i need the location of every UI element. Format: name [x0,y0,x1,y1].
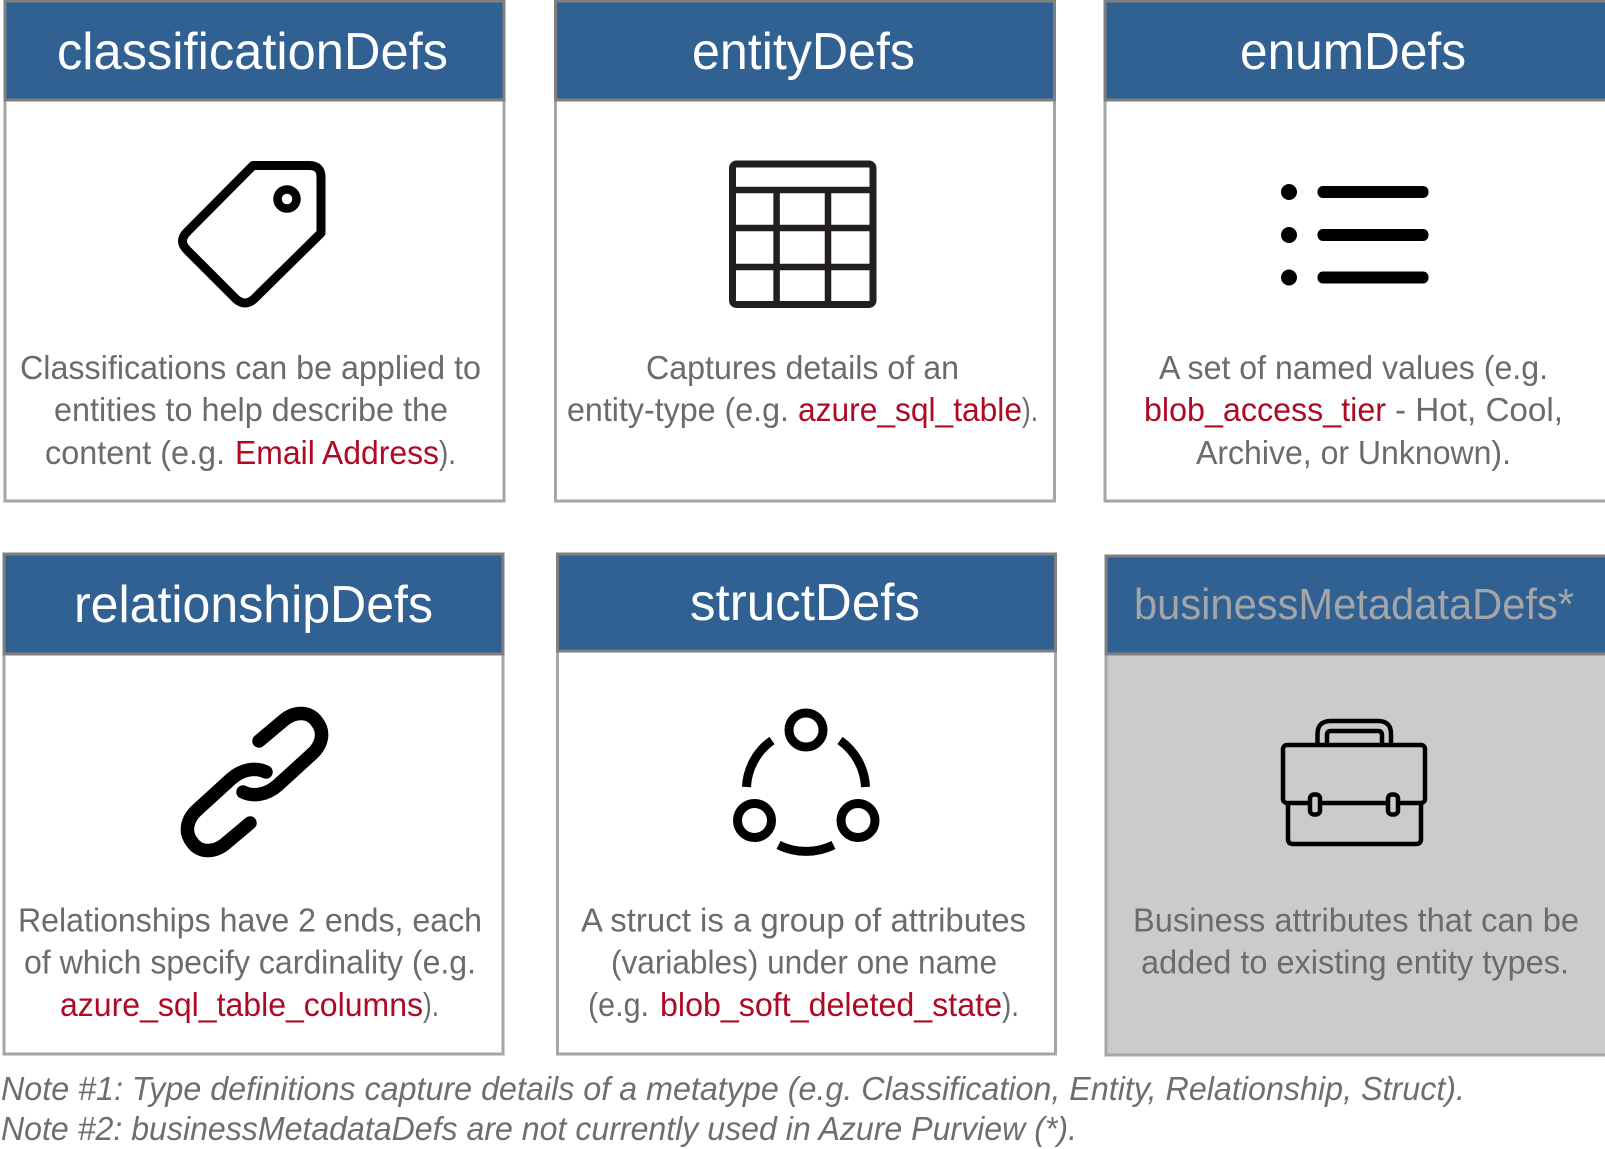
heading: structDefs: structDefs [690,574,920,632]
text: enum description [1144,349,1563,471]
text: classification description: content (e.g. [45,434,225,471]
panel: structDefs [558,554,1056,1054]
text: entity description [567,349,1038,428]
heading: classificationDefs: classificationDefs [57,23,448,81]
text: business metadata description: Business attributes that can be [1133,902,1579,938]
heading: businessMetadataDefs: businessMetadataDefs* [1134,580,1574,629]
icon: list [1281,184,1428,286]
text: classification description: Classifications can be applied to [20,349,481,386]
text: business metadata description [1133,902,1579,980]
text: struct description: (e.g. [588,986,649,1023]
panel: businessMetadataDefs [1106,556,1605,1055]
footnotes: Note #1: Type definitions capture details of a metatype (e.g. Classification, Entity, Relationship, Struct). [1,1070,1465,1107]
panel: classificationDefs [5,1,504,501]
text: enum description: blob_access_tier [1144,391,1386,428]
text: classification description [20,349,481,471]
text: enum description: A set of named values (e.g. [1159,349,1548,386]
text: relationship description: of which specify cardinality (e.g. [24,944,476,980]
text: classification description: ). [439,434,456,471]
text: classification description: Email Address [235,434,439,471]
text: struct description [581,902,1026,1023]
text: entity description: Captures details of an [646,349,959,386]
panel: enumDefs [1105,1,1605,501]
text: classification description: entities to help describe the [54,391,448,428]
icon: connected circles [738,713,875,851]
text: struct description: blob_soft_deleted_state [660,986,1002,1023]
text: struct description: ). [1002,986,1019,1023]
text: struct description: A struct is a group of attributes [581,902,1026,938]
icon: briefcase [1283,721,1425,844]
text: business metadata description: added to existing entity types. [1141,944,1569,980]
panel: entityDefs [556,1,1054,501]
text: enum description: Archive, or Unknown). [1196,434,1511,471]
heading: entityDefs: entityDefs [692,23,915,81]
heading: relationshipDefs: relationshipDefs [74,576,433,634]
footnotes [1,1070,1465,1147]
panel: relationshipDefs [4,554,503,1054]
text: entity description: entity-type (e.g. [567,391,789,428]
icon: chain link [187,713,322,851]
text: relationship description [18,902,482,1023]
text: entity description: azure_sql_table [798,391,1022,428]
text: entity description: ). [1022,391,1038,428]
icon: tag [182,166,321,303]
text: struct description: (variables) under one name [611,944,997,980]
heading: enumDefs: enumDefs [1240,23,1466,81]
text: enum description: - Hot, Cool, [1395,391,1563,428]
text: relationship description: ). [423,986,439,1023]
footnotes: Note #2: businessMetadataDefs are not currently used in Azure Purview (*). [1,1110,1077,1147]
text: relationship description: azure_sql_table_columns [60,986,423,1023]
text: relationship description: Relationships have 2 ends, each [18,902,482,938]
icon: table [732,164,873,304]
